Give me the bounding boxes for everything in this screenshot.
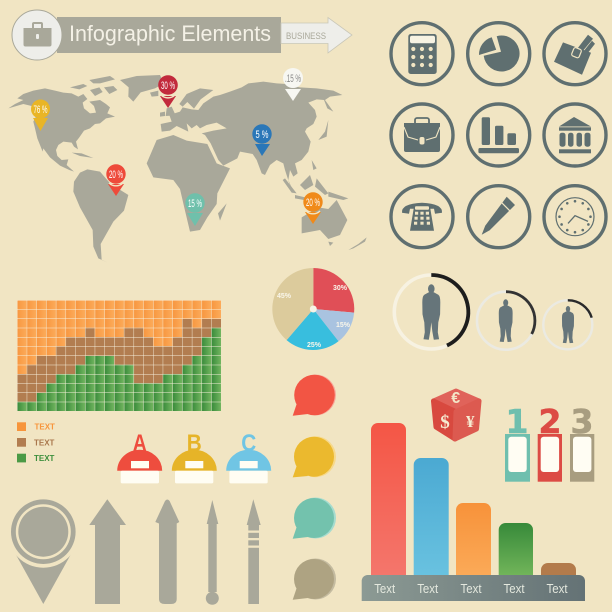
icon: briefcase badge	[12, 10, 62, 60]
currency dice: $	[440, 412, 450, 433]
large map pin shape	[7, 496, 79, 604]
arrow thermometer	[206, 500, 219, 605]
number tag 1	[505, 402, 530, 482]
icon: clock	[544, 186, 606, 248]
currency dice	[434, 390, 479, 439]
header banner	[12, 10, 352, 60]
bar chart	[362, 423, 585, 601]
legend: TEXT	[34, 422, 55, 432]
speech bubble red	[293, 374, 336, 416]
pin: 20% South America	[106, 164, 126, 196]
number tag 1: 1	[506, 402, 528, 441]
pie chart: 25%	[307, 342, 322, 349]
arrow striped	[247, 499, 261, 604]
legend	[17, 422, 55, 463]
number tag 3: 3	[571, 402, 593, 441]
arrow rounded	[155, 500, 179, 604]
tag C: C	[241, 430, 256, 457]
person ring large	[394, 275, 468, 349]
pin: 30%	[158, 75, 178, 108]
icon: telephone	[391, 186, 453, 248]
pin: 20% South America: 20 %	[109, 169, 123, 181]
pin: 5%	[252, 124, 272, 156]
title bar	[57, 17, 281, 53]
business arrow	[281, 18, 352, 53]
icon: calculator	[391, 23, 453, 85]
pin: 20% Australia: 20 %	[306, 197, 320, 209]
icon: briefcase	[391, 104, 453, 166]
pin: 30%: 30 %	[161, 80, 175, 92]
bar chart: Text	[374, 581, 396, 596]
pin: 20% Australia	[303, 192, 323, 224]
pin: 15% north: .15 %	[285, 73, 301, 85]
tag B: B	[187, 430, 202, 457]
speech bubble tan	[293, 558, 336, 600]
business arrow: BUSINESS	[286, 31, 326, 42]
number tag 2: 2	[539, 402, 561, 441]
tag B	[172, 430, 217, 483]
bar chart: Text	[546, 581, 568, 596]
currency dice: ¥	[466, 412, 475, 431]
world map	[8, 75, 367, 262]
pie chart: 15%	[336, 322, 351, 329]
person ring medium	[477, 292, 535, 350]
arrow wide	[89, 499, 126, 604]
pin: 15% north	[283, 68, 303, 101]
icon: wallet	[544, 23, 606, 85]
tag C	[226, 430, 271, 483]
icon: bar chart	[468, 104, 530, 166]
icon: pencil	[468, 186, 530, 248]
pin: 15% Africa	[185, 193, 205, 226]
tag A	[117, 430, 162, 483]
pin: 15% Africa: 15 %	[188, 198, 202, 210]
pin: 76%: 76 %	[34, 104, 48, 116]
icon: bank	[544, 104, 606, 166]
bar chart: Text	[460, 581, 482, 596]
legend: TEXT	[34, 438, 55, 447]
stacked grid chart	[17, 300, 221, 411]
title: Infographic Elements	[69, 21, 271, 46]
legend: TEXT	[34, 454, 55, 463]
number tag 2	[538, 402, 562, 482]
pin: 76%	[31, 100, 50, 131]
tag A: A	[133, 430, 147, 457]
number tag 3	[570, 402, 594, 482]
currency dice: €	[451, 390, 460, 407]
pie chart: 30%	[333, 285, 348, 292]
bar chart: Text	[504, 581, 525, 596]
icon: pie chart	[468, 23, 530, 85]
bar chart: Text	[417, 581, 439, 596]
pin: 5%: 5 %	[256, 129, 269, 141]
speech bubble yellow	[293, 436, 336, 477]
speech bubble teal	[293, 498, 336, 539]
pie chart	[272, 268, 354, 350]
person ring small	[543, 300, 592, 349]
pie chart: 45%	[277, 293, 292, 300]
